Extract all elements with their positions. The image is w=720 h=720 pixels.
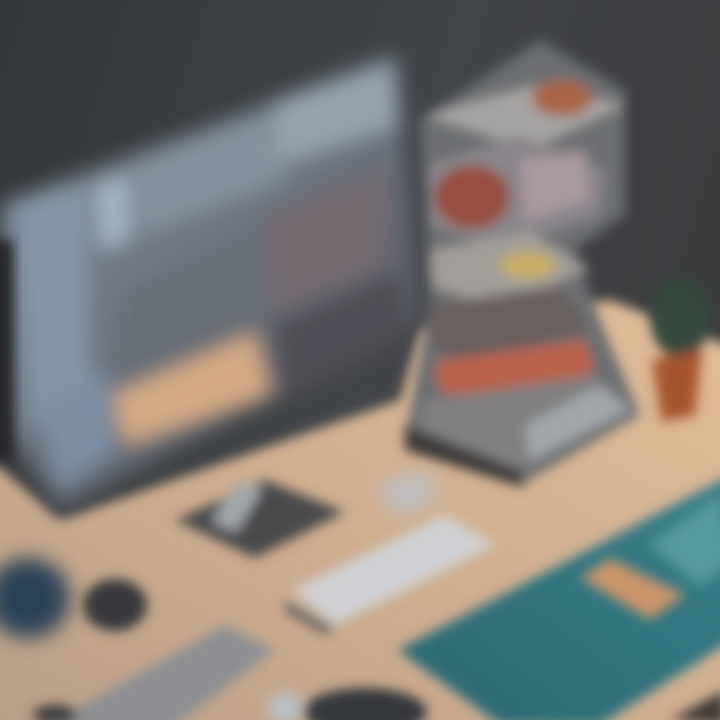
monitor: bright column	[95, 175, 130, 250]
monitor: lower blue block	[35, 370, 115, 490]
paper near stand	[375, 470, 440, 515]
monitor: left column	[15, 185, 90, 430]
keyboard	[285, 515, 495, 635]
shelf: books	[430, 285, 590, 365]
plant	[650, 278, 710, 422]
monitor: central panel	[265, 170, 385, 315]
monitor: top band	[135, 110, 285, 235]
teal desk mat	[398, 470, 720, 720]
monitor: orange panel	[112, 332, 270, 445]
card on mat	[580, 558, 685, 620]
shelf frame	[405, 40, 640, 485]
desk surface	[0, 300, 720, 720]
shelf stack	[405, 40, 640, 488]
monitor	[0, 55, 420, 510]
shelf: third tier	[430, 232, 590, 310]
plant leaves	[650, 278, 710, 358]
left dark speaker	[0, 558, 70, 638]
lower dark mouse device	[267, 688, 427, 720]
shelf: second tier	[430, 135, 605, 250]
lower keyboard	[33, 625, 275, 720]
mouse	[83, 579, 147, 631]
left dark monitor edge	[0, 240, 13, 460]
shelf: top tier	[425, 85, 625, 150]
lower right corner	[670, 690, 720, 720]
plant pot	[652, 350, 702, 422]
monitor: lower right dark panel	[272, 270, 410, 400]
monitor: mid panel	[120, 235, 265, 380]
monitor stand base	[175, 480, 345, 558]
